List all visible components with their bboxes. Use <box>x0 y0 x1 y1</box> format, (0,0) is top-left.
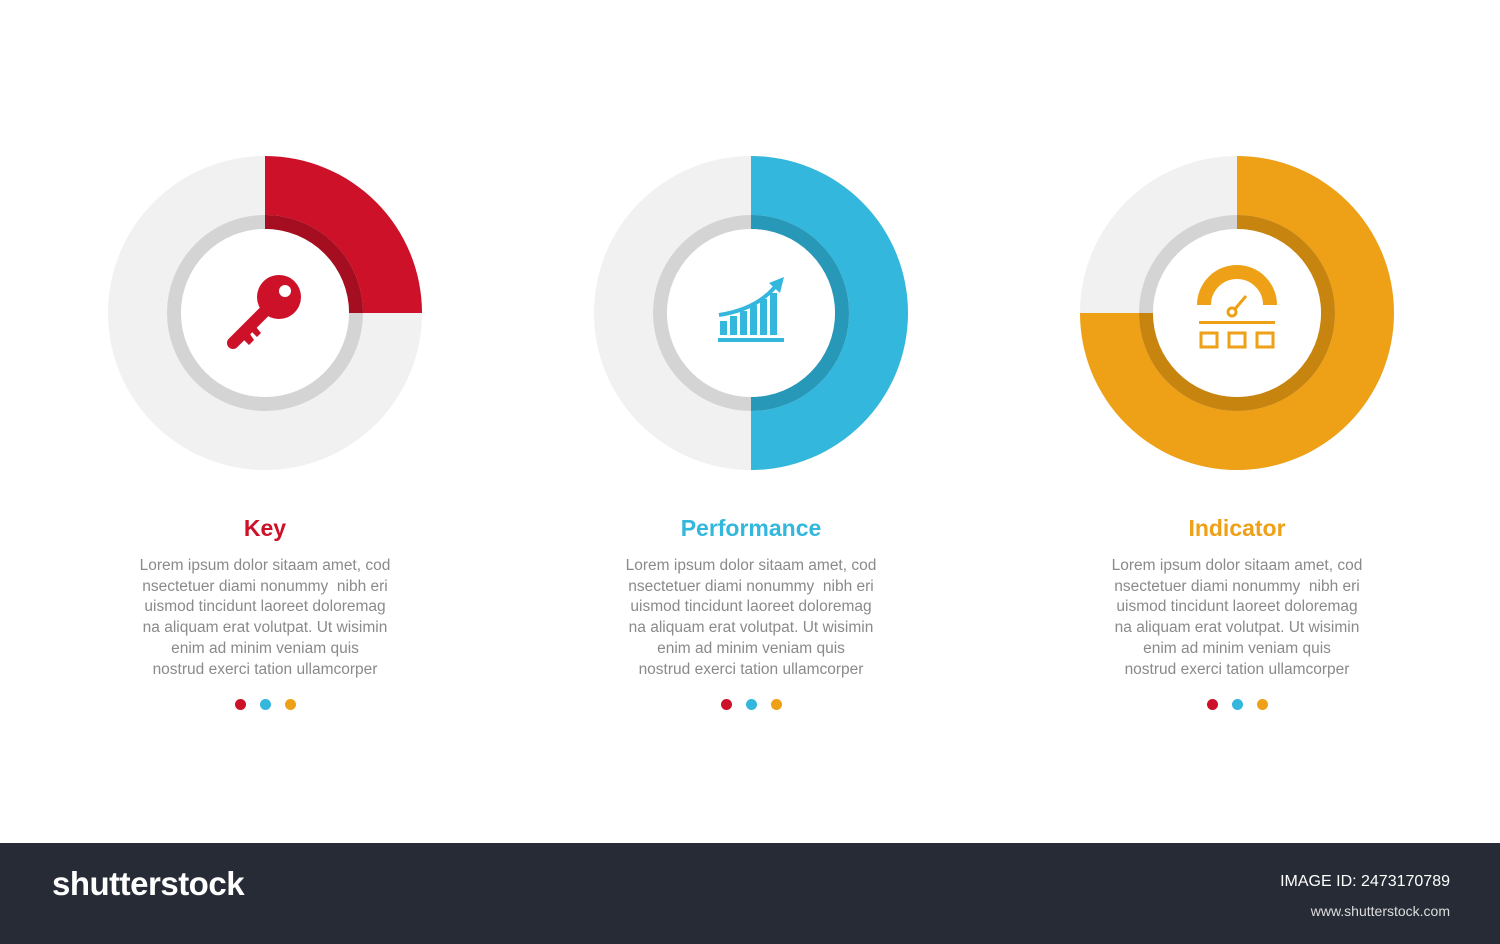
dots <box>721 699 782 710</box>
donut: performance <box>594 156 908 470</box>
heading: indicator: Indicator <box>1188 515 1286 541</box>
text block: key: nostrud exerci tation ullamcorper <box>153 661 377 678</box>
text block: key: na aliquam erat volutpat. Ut wisimin <box>143 619 387 636</box>
text block: performance: uismod tincidunt laoreet doloremag <box>630 598 872 615</box>
text block: indicator: nostrud exerci tation ullamcorper <box>1125 661 1349 678</box>
text block: indicator: uismod tincidunt laoreet doloremag <box>1116 598 1358 615</box>
icon: growth chart <box>718 277 784 342</box>
text block: performance: nostrud exerci tation ullamcorper <box>639 661 863 678</box>
text block: indicator: na aliquam erat volutpat. Ut wisimin <box>1115 619 1359 636</box>
donut: key <box>108 156 422 470</box>
dots <box>235 699 296 710</box>
column: key text <box>140 515 390 710</box>
text block: key: uismod tincidunt laoreet doloremag <box>144 598 386 615</box>
column: performance text <box>626 515 876 710</box>
heading: key: Key <box>244 515 286 541</box>
icon: gauge <box>1199 272 1275 347</box>
text block: indicator: Lorem ipsum dolor sitaam amet, cod <box>1112 557 1362 574</box>
donut: indicator <box>1080 156 1394 470</box>
heading: performance: Performance <box>681 515 821 541</box>
text block: indicator <box>1112 557 1362 678</box>
image id: IMAGE ID: 2473170789 <box>1280 873 1450 890</box>
dots <box>1207 699 1268 710</box>
text block: key: nsectetuer diami nonummy nibh eri <box>142 578 388 595</box>
website: www.shutterstock.com <box>1311 903 1450 919</box>
text block: performance: na aliquam erat volutpat. Ut wisimin <box>629 619 873 636</box>
text block: performance: nsectetuer diami nonummy nibh eri <box>628 578 874 595</box>
text block: indicator: enim ad minim veniam quis <box>1143 640 1331 657</box>
text block: key: Lorem ipsum dolor sitaam amet, cod <box>140 557 390 574</box>
text block: indicator: nsectetuer diami nonummy nibh eri <box>1114 578 1360 595</box>
text block: performance <box>626 557 876 678</box>
logo text: shutterstock <box>52 865 244 902</box>
footer bar <box>0 843 1500 944</box>
column: indicator text <box>1112 515 1362 710</box>
text block: key <box>140 557 390 678</box>
icon: key <box>233 275 301 345</box>
text block: key: enim ad minim veniam quis <box>171 640 359 657</box>
text block: performance: enim ad minim veniam quis <box>657 640 845 657</box>
text block: performance: Lorem ipsum dolor sitaam amet, cod <box>626 557 876 574</box>
